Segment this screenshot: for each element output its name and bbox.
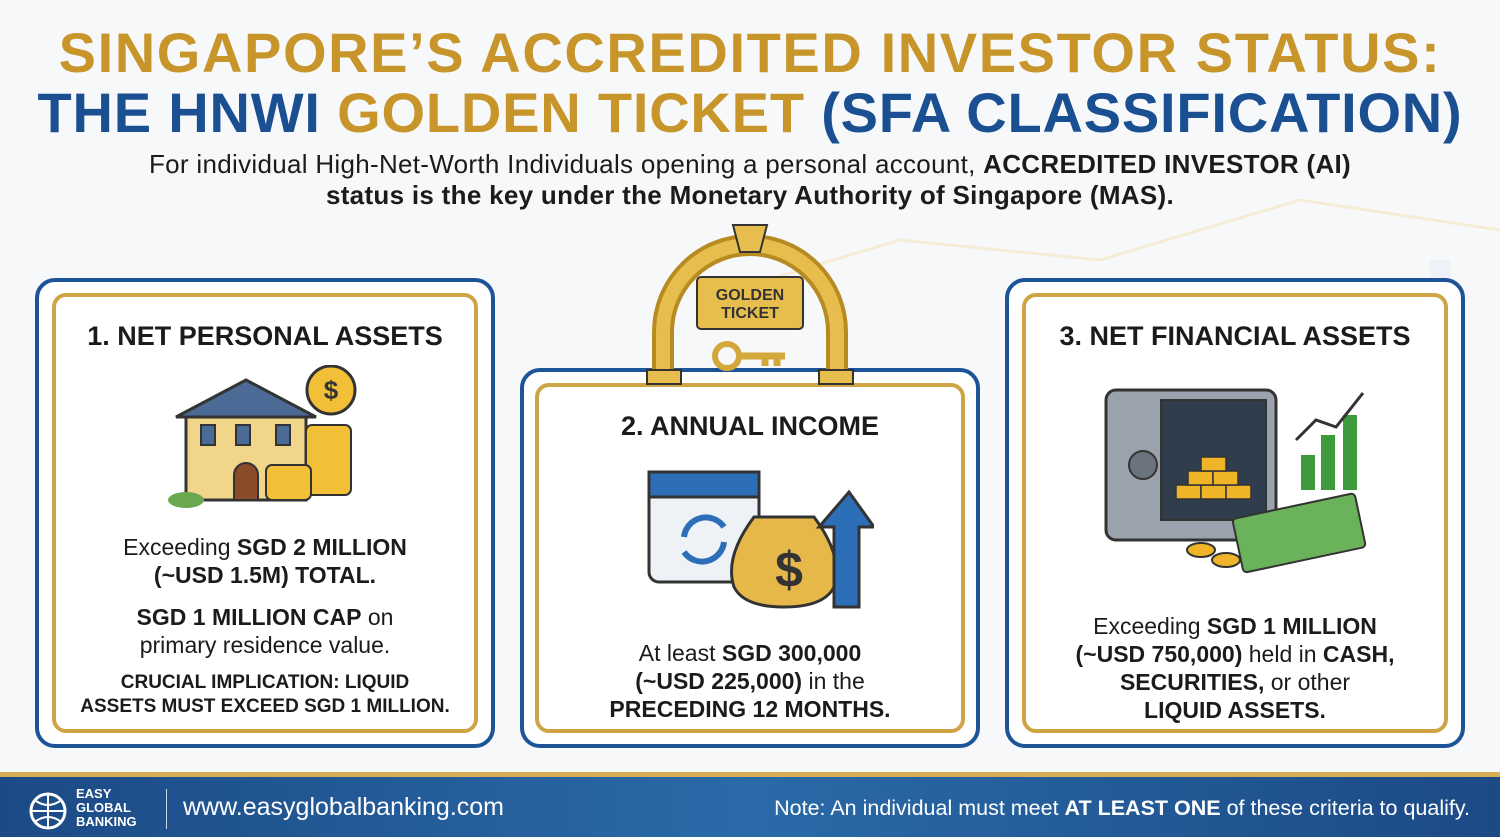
icon: calendar and money bag <box>648 470 874 608</box>
text: criteria <box>609 640 891 722</box>
text: criteria: SECURITIES, or other <box>1120 669 1350 695</box>
logo: GLOBAL <box>76 800 131 815</box>
panel: net personal assets: primary residence value. <box>140 632 390 658</box>
icon: golden arch with ticket and key: TICKET <box>721 305 779 322</box>
panel: net personal assets: CRUCIAL IMPLICATION: LIQUID <box>121 672 409 693</box>
icon: safe with gold and cash <box>1104 388 1366 574</box>
heading: 3. NET FINANCIAL ASSETS <box>1059 321 1411 351</box>
subtitle: For individual High-Net-Worth Individuals opening a personal account, ACCREDITED INVESTOR (AI) <box>149 149 1351 179</box>
icon: golden arch with ticket and key: GOLDEN <box>716 287 784 304</box>
panel: net personal assets: ASSETS MUST EXCEED SGD 1 MILLION. <box>80 696 450 717</box>
text: criteria: Exceeding SGD 2 MILLION <box>123 534 407 560</box>
text: criteria <box>1076 613 1394 723</box>
icon: house with coins <box>168 365 356 508</box>
title line 2: THE HNWI GOLDEN TICKET (SFA CLASSIFICATION) <box>37 81 1462 144</box>
logo <box>30 786 137 830</box>
heading: 1. NET PERSONAL ASSETS <box>87 321 443 351</box>
icon: house with coins: $ <box>324 375 339 405</box>
text: criteria <box>123 534 407 588</box>
website: www.easyglobalbanking.com <box>183 793 504 821</box>
icon: calendar and money bag: $ <box>775 542 803 598</box>
heading: 2. ANNUAL INCOME <box>621 411 879 441</box>
logo: EASY <box>76 786 111 801</box>
subtitle <box>149 149 1351 210</box>
text: criteria: (~USD 1.5M) TOTAL. <box>154 562 376 588</box>
text: criteria: (~USD 750,000) held in CASH, <box>1076 641 1394 667</box>
panel: net personal assets: SGD 1 MILLION CAP on <box>137 604 393 630</box>
text: criteria: (~USD 225,000) in the <box>635 668 865 694</box>
text: criteria: Exceeding SGD 1 MILLION <box>1093 613 1377 639</box>
panel: net financial assets <box>1005 278 1465 748</box>
note: Note: An individual must meet AT LEAST ONE of these criteria to qualify. <box>774 796 1470 820</box>
text: criteria: LIQUID ASSETS. <box>1144 697 1326 723</box>
title line 1: SINGAPORE’S ACCREDITED INVESTOR STATUS: <box>59 21 1441 84</box>
panel: net personal assets <box>35 278 495 748</box>
panel: annual income <box>520 368 980 748</box>
subtitle: status is the key under the Monetary Authority of Singapore (MAS). <box>326 180 1174 210</box>
text: criteria: PRECEDING 12 MONTHS. <box>609 696 891 722</box>
text: criteria: At least SGD 300,000 <box>639 640 861 666</box>
icon: golden arch with ticket and key <box>646 224 854 385</box>
logo: BANKING <box>76 814 137 829</box>
footer bar <box>0 772 1500 837</box>
